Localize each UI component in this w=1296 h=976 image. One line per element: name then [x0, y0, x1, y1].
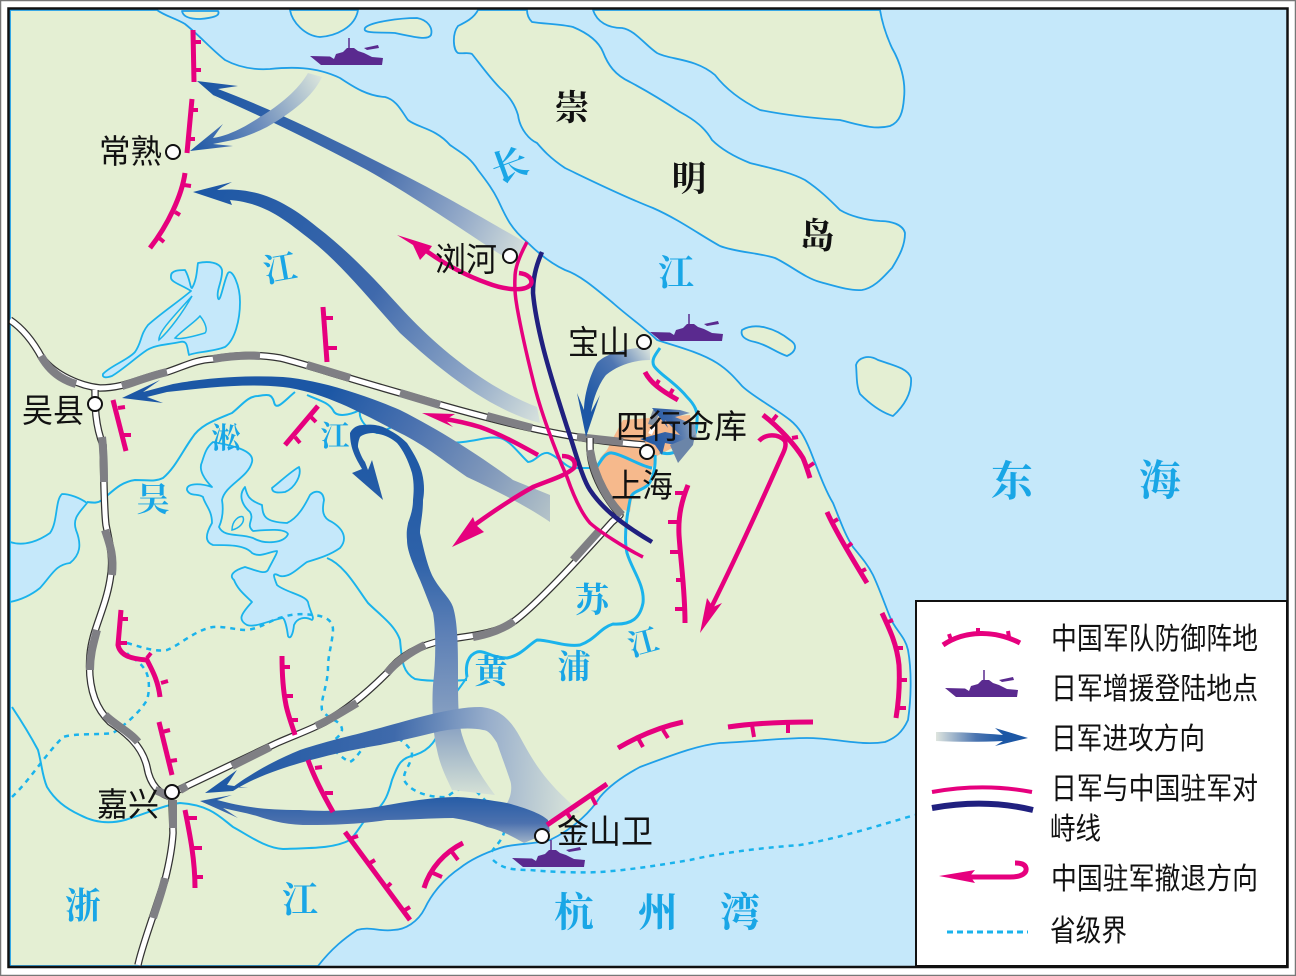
- water and region names: 州: [638, 890, 678, 935]
- legend: confrontation lines: [932, 788, 1033, 810]
- place labels: 宝山: [568, 324, 630, 361]
- land: northern shore: [593, 10, 904, 127]
- arrow: east retreat: [700, 435, 786, 633]
- water and region names: 江: [658, 253, 694, 293]
- legend panel: [916, 601, 1287, 966]
- water and region names: 江: [261, 249, 300, 291]
- water and region names: 海: [1139, 458, 1181, 505]
- place labels: 上海: [611, 467, 673, 504]
- arrow: central retreat north: [422, 413, 538, 455]
- legend labels: 峙线: [1050, 813, 1101, 846]
- arrow: Liuhe retreat: [397, 235, 531, 289]
- arrow: converging on Sihang warehouse: [640, 408, 697, 463]
- arrow: central retreat south-west: [452, 456, 575, 547]
- place labels: [22, 133, 747, 850]
- legend labels: 中国军队防御阵地: [1051, 623, 1258, 656]
- water and region names: 浦: [558, 649, 590, 686]
- legend labels: [1050, 623, 1258, 948]
- water and region names: 浙: [65, 886, 101, 926]
- water and region names: [65, 141, 1181, 935]
- island name: 明: [671, 160, 707, 199]
- water and region names: 苏: [575, 582, 612, 620]
- legend: defense line: [943, 628, 1020, 645]
- arrow: to south of Changshu: [193, 182, 540, 423]
- place labels: 嘉兴: [97, 786, 159, 823]
- legend labels: 中国驻军撤退方向: [1051, 863, 1258, 896]
- water and region names: 杭: [554, 890, 594, 935]
- place labels: 常熟: [99, 133, 162, 170]
- Shanghai urban area: [597, 415, 694, 512]
- arrow: Jinshan to Jiaxing: [200, 795, 550, 843]
- land: top islet: [290, 10, 358, 37]
- water and region names: 江: [320, 421, 350, 453]
- legend labels: 日军与中国驻军对: [1051, 773, 1258, 806]
- legend: retreat arrow: [939, 863, 1026, 883]
- legend: provincial boundary: [947, 930, 1028, 934]
- land: east islets: [742, 326, 911, 416]
- rail stub at Sihang warehouse: [650, 424, 655, 434]
- arrow: north from Jinshan curling: [350, 425, 495, 795]
- provincial boundary: [12, 614, 915, 872]
- water and region names: 江: [625, 624, 662, 663]
- lake: west: [10, 494, 87, 602]
- legend: landing ship: [945, 670, 1018, 697]
- arrow: landing to Changshu: [190, 73, 322, 151]
- place markers: [88, 145, 654, 843]
- railways: [10, 320, 645, 965]
- lake: Dianshan group: [187, 442, 344, 637]
- lake: Yangcheng group: [103, 262, 240, 377]
- water and region names: 长: [486, 141, 534, 191]
- water and region names: 吴: [136, 482, 170, 519]
- land: Chongming island: [454, 10, 905, 290]
- place labels: 浏河: [435, 241, 497, 278]
- legend labels: 日军进攻方向: [1051, 723, 1205, 756]
- Japanese advance arrows: [122, 73, 697, 843]
- land: sliver islet: [365, 18, 431, 38]
- place labels: 金山卫: [557, 813, 653, 850]
- legend labels: 日军增援登陆地点: [1051, 673, 1258, 706]
- legend box: [916, 601, 1287, 966]
- retreat arrows: [397, 235, 786, 633]
- Chinese defense lines: [113, 30, 907, 920]
- island name: 岛: [799, 217, 835, 256]
- rivers: [12, 348, 697, 849]
- water and region names: 东: [991, 459, 1036, 506]
- arrow: to Wu county: [122, 376, 550, 522]
- water and region names: 江: [282, 880, 318, 920]
- water and region names: 湾: [720, 890, 762, 935]
- land: top-left sliver: [182, 11, 219, 19]
- water and region names: 淞: [211, 422, 242, 455]
- island name: 崇: [554, 89, 590, 128]
- legend: advance arrow: [936, 728, 1028, 746]
- land: mainland: [10, 10, 911, 966]
- water and region names: 黄: [474, 654, 512, 691]
- arrow: north band from Jinshan to Jiaxing: [205, 707, 580, 820]
- place labels: 吴县: [22, 392, 84, 429]
- arrow: Baoshan to Shanghai: [577, 347, 650, 437]
- arrow: to Changshu north: [197, 81, 528, 262]
- Japanese landing ships: [310, 38, 723, 867]
- legend labels: 省级界: [1050, 915, 1127, 948]
- place labels: 四行仓库: [616, 408, 747, 445]
- Sino-Japanese confrontation lines: [515, 242, 652, 557]
- island name: [554, 89, 835, 256]
